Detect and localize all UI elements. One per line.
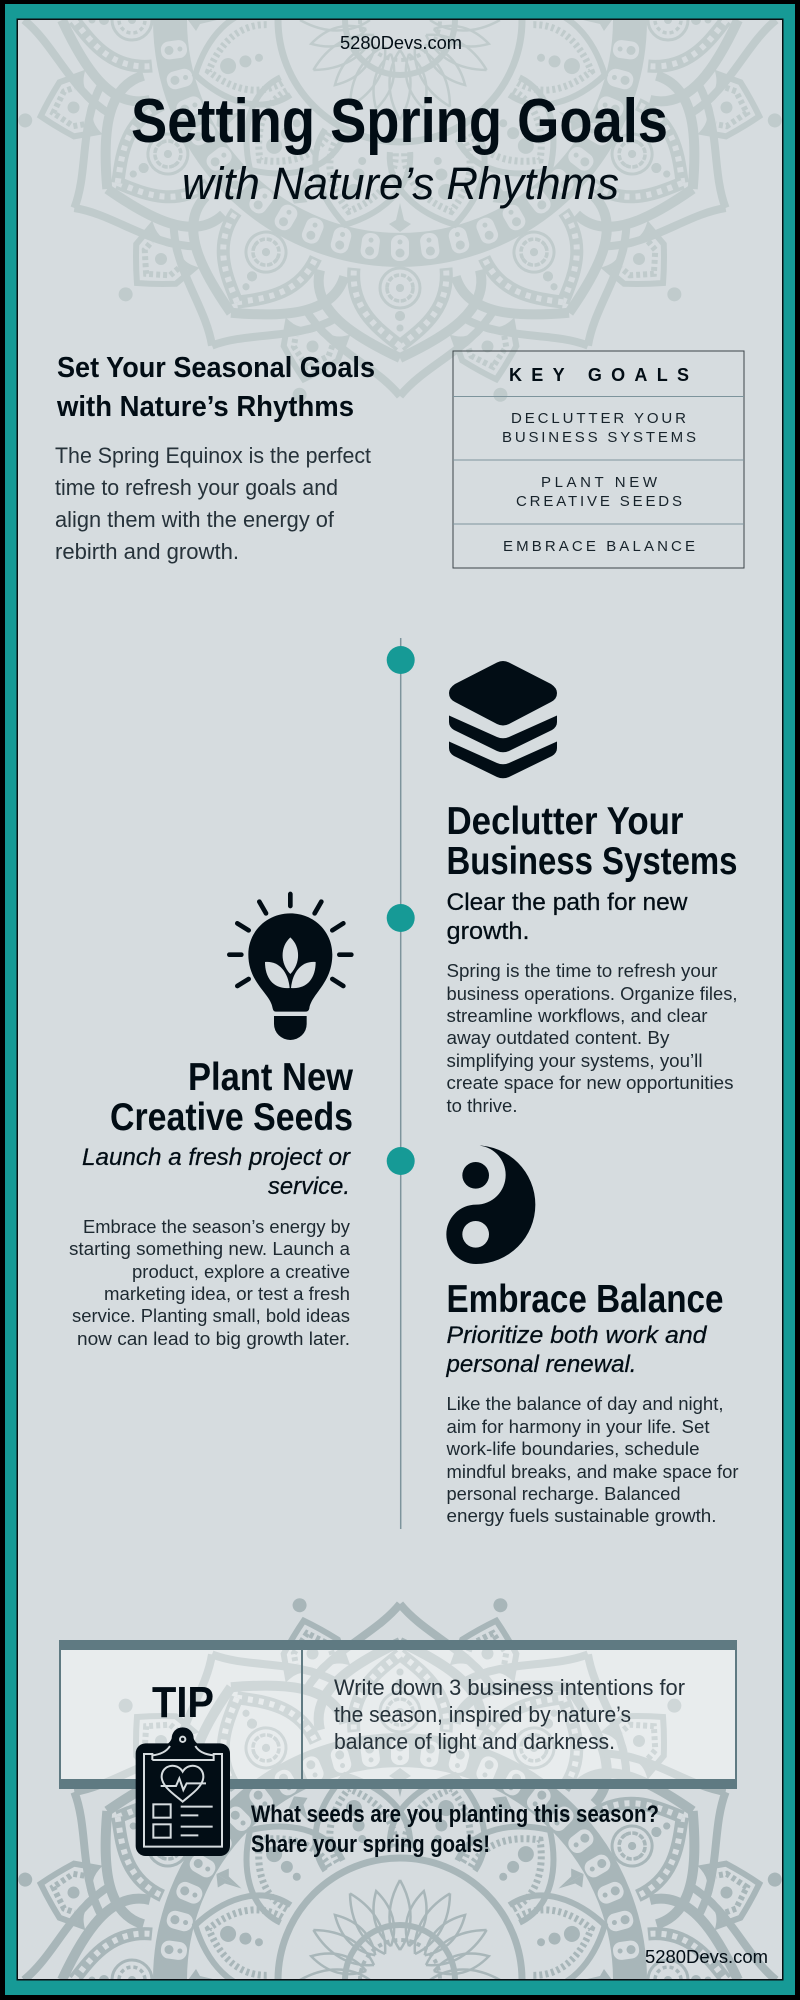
goal list: BUSINESS SYSTEMS: [502, 429, 696, 446]
body text: service. Planting small, bold ideas: [72, 1306, 350, 1326]
timeline: [387, 638, 415, 1529]
call to action: What seeds are you planting this season?: [251, 1801, 659, 1828]
body text: business operations. Organize files,: [446, 984, 738, 1004]
icon: layered stack: [449, 661, 557, 778]
panel: intro: [55, 352, 375, 564]
goal list: PLANT NEW: [541, 474, 658, 491]
subheading: [82, 1144, 351, 1200]
tip text: [334, 1675, 685, 1754]
title: Setting Spring Goals: [131, 87, 668, 156]
body text: create space for new opportunities: [446, 1073, 734, 1093]
intro paragraph: The Spring Equinox is the perfect: [55, 443, 371, 468]
heading: Business Systems: [446, 840, 738, 883]
body text: to thrive.: [446, 1096, 518, 1116]
icon: yin yang: [446, 1145, 535, 1264]
subheading: [446, 889, 688, 945]
body text: simplifying your systems, you’ll: [446, 1051, 702, 1071]
heading: [446, 800, 738, 883]
icon: clipboard with heart: [136, 1727, 230, 1856]
panel: balance: [445, 1145, 738, 1526]
panel: declutter: [446, 661, 738, 1116]
heading: [110, 1056, 354, 1139]
panel: key goals table: [453, 351, 744, 568]
goal list: EMBRACE BALANCE: [503, 538, 695, 555]
subheading: [445, 1322, 707, 1378]
subheading: Prioritize both work and: [446, 1322, 707, 1349]
intro paragraph: time to refresh your goals and: [55, 475, 338, 500]
icon: light bulb with sprout: [229, 894, 351, 1040]
panel: tip box: [59, 1640, 737, 1789]
background mandala: bottom: [18, 1598, 782, 1979]
body text: mindful breaks, and make space for: [446, 1462, 738, 1482]
intro heading: [56, 352, 375, 423]
body text: marketing idea, or test a fresh: [104, 1284, 350, 1304]
body text: [69, 1217, 351, 1349]
background mandala: top: [18, 20, 782, 402]
body text: Spring is the time to refresh your: [446, 961, 718, 981]
intro heading: with Nature’s Rhythms: [56, 391, 354, 423]
body text: streamline workflows, and clear: [446, 1006, 708, 1026]
body text: product, explore a creative: [132, 1262, 350, 1282]
body text: aim for harmony in your life. Set: [446, 1417, 710, 1437]
goal list: DECLUTTER YOUR: [511, 410, 686, 427]
body text: starting something new. Launch a: [69, 1239, 351, 1259]
heading: Creative Seeds: [110, 1096, 353, 1139]
body text: Like the balance of day and night,: [446, 1394, 724, 1414]
intro paragraph: align them with the energy of: [55, 507, 335, 532]
body text: [446, 961, 738, 1116]
body text: energy fuels sustainable growth.: [446, 1506, 716, 1526]
subheading: growth.: [446, 918, 530, 945]
title: with Nature’s Rhythms: [182, 158, 619, 209]
subheading: service.: [268, 1173, 350, 1200]
tip text: the season, inspired by nature’s: [334, 1702, 631, 1727]
subheading: Launch a fresh project or: [82, 1144, 351, 1171]
key goals heading: KEY GOALS: [509, 365, 689, 385]
intro heading: Set Your Seasonal Goals: [57, 352, 375, 384]
brand label: bottom: 5280Devs.com: [645, 1947, 768, 1967]
goal list: [502, 410, 696, 555]
heading: Plant New: [188, 1056, 354, 1099]
title: [131, 87, 668, 209]
call to action: Share your spring goals!: [251, 1831, 490, 1858]
body text: away outdated content. By: [446, 1028, 670, 1048]
heading: Embrace Balance: [446, 1278, 724, 1321]
brand label: top: 5280Devs.com: [340, 33, 462, 53]
intro paragraph: [55, 443, 371, 564]
subheading: personal renewal.: [445, 1351, 636, 1378]
tip label: TIP: [152, 1678, 214, 1727]
tip text: Write down 3 business intentions for: [334, 1675, 685, 1700]
subheading: Clear the path for new: [446, 889, 688, 916]
body text: [445, 1394, 738, 1526]
call to action: [251, 1801, 659, 1858]
body text: Embrace the season’s energy by: [83, 1217, 350, 1237]
goal list: CREATIVE SEEDS: [516, 493, 682, 510]
panel: plant: [69, 894, 354, 1349]
intro paragraph: rebirth and growth.: [55, 539, 239, 564]
body text: personal recharge. Balanced: [446, 1484, 680, 1504]
body text: now can lead to big growth later.: [77, 1329, 350, 1349]
body text: work-life boundaries, schedule: [445, 1439, 700, 1459]
heading: Declutter Your: [446, 800, 684, 843]
tip text: balance of light and darkness.: [334, 1729, 615, 1754]
